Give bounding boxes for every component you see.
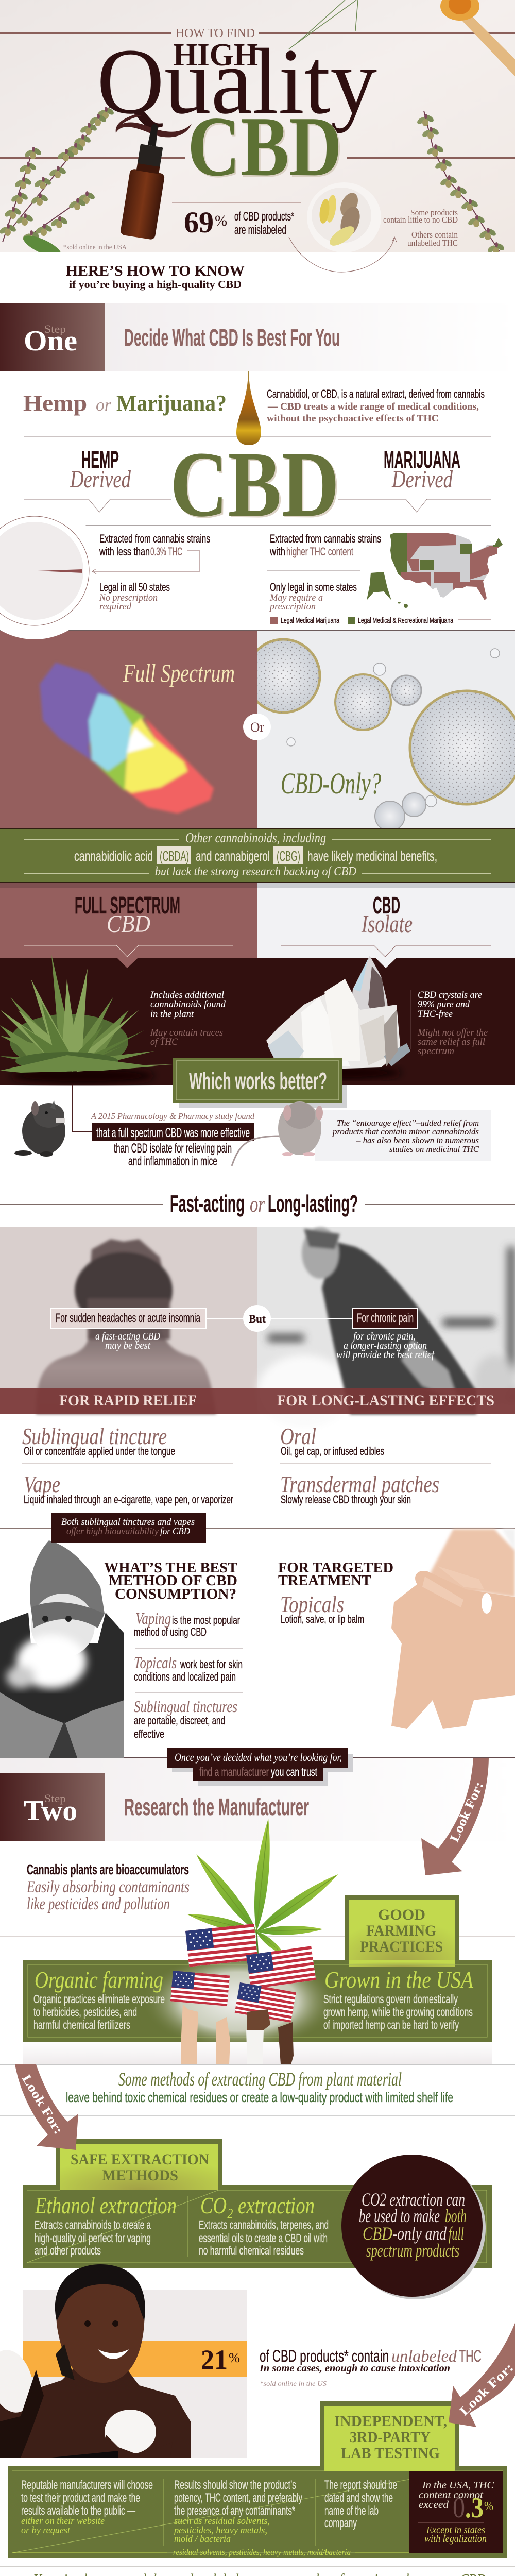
banner: relief labels: FOR LONG-LASTING EFFECTS [277,1392,494,1409]
panel: entourage effect: products that contain minor cannabinoids [332,1127,479,1137]
text: unlabeled THC [259,2347,482,2388]
callout: CO2 extraction oval: both [445,2206,467,2226]
text: method notes: Topicals [134,1653,177,1672]
callout: THC limit: 0 [453,2492,465,2524]
text: oral: Oral [280,1423,316,1449]
text: sublingual tincture: Oil or concentrate applied under the tongue [24,1445,175,1458]
legend: map key [270,616,491,625]
callout: find a manufacturer [167,1748,353,1786]
text: sublingual tincture: Sublingual tincture [22,1423,167,1449]
callout: rapid relief [50,1309,353,1351]
text: 2015 study: that a full spectrum CBD was more effective [96,1126,250,1140]
title: High Quality CBD: CBD [187,99,342,194]
text: marijuana facts: Extracted from cannabis strains [270,532,381,545]
text: unlabeled THC: In some cases, enough to cause intoxication [259,2363,450,2374]
illustration: smiling woman [0,2264,191,2458]
callout: CO2 extraction oval: CBD [363,2223,392,2244]
panel: good farming: Organic practices eliminate exposure [33,1992,165,2006]
text: column report: name of the lab [324,2504,379,2518]
panel: 21 percent photo: 21 [201,2344,228,2375]
panel: step two background: Two [24,1795,77,1827]
panel: good farming: GOOD [378,1906,425,1923]
panel: other cannabinoids band: (CBG) [277,848,300,864]
callout: find a manufacturer: Once you’ve decided what you’re looking for, [175,1751,342,1764]
illustration: CBD crystal [266,956,410,1070]
panel: good farming: harmful chemical fertilizers [33,2018,130,2031]
text: hemp facts: No prescription [99,592,158,603]
text: unlabeled THC: of CBD products* contain [260,2347,389,2365]
heading: best method [104,1560,237,1602]
panel: step one header [0,303,515,371]
heading: targeted treatment [278,1560,393,1625]
text: method notes: is the most popular [172,1614,240,1626]
panel: step one header: One [24,325,77,357]
panel: good farming: to herbicides, pesticides, and [33,2005,137,2019]
panel: good farming: FARMING [366,1922,436,1939]
text: isolate notes [410,990,488,1057]
legend: map key: Legal Medical Marijuana [281,616,339,625]
text: method notes: Sublingual tinctures [134,1697,237,1716]
panel: full spectrum CBD header [0,883,257,958]
text: vape [24,1471,233,1506]
panel: safe extraction: METHODS [102,2167,178,2184]
heading: here's how to know: HERE’S HOW TO KNOW [66,263,245,279]
panel: CBD isolate header [257,883,515,958]
panel: entourage effect: The “entourage effect”–added relief from [337,1118,479,1128]
arrow: look for farming [421,1758,489,1875]
illustration: hands with lotion [391,1529,515,1729]
text: column results [173,2478,302,2545]
heading: here's how to know [66,263,245,291]
text: column results: the presence of any contaminants* [174,2504,295,2518]
text: hemp facts: Extracted from cannabis strains [99,532,210,545]
panel: entourage effect: studies on medicinal THC [389,1144,479,1154]
panel: lab testing: 3RD-PARTY [350,2429,431,2446]
panel: step two background [0,1758,515,1841]
panel: 21 percent photo: % [229,2350,240,2365]
heading: hemp or marijuana: Hemp [23,391,87,416]
icon: basil sprigs left [0,106,115,261]
panel: consumption methods [22,1423,491,1506]
panel: safe extraction: Extracts cannabinoids to create a [35,2218,151,2231]
illustration: waving flags [170,1924,316,2064]
icon: dropper bottle [120,121,173,240]
badge: but: But [249,1312,266,1325]
stat: 69% mislabeled: of CBD products* [234,210,294,224]
text: column report: The report should be [324,2478,397,2492]
callout: bioavailability: offer high bioavailability [66,1526,159,1537]
heading: fast-acting or long-lasting: Long-lasting? [268,1190,358,1217]
panel: safe extraction: no harmful chemical residues [199,2244,304,2257]
arrow: look for farming: Look For: [448,1780,486,1844]
text: isolate notes: CBD crystals are [418,990,482,1001]
panel: other cannabinoids band: and cannabigerol [196,848,270,864]
callout: find a manufacturer: find a manufacturer [199,1765,269,1778]
text: bioaccumulators [26,1861,190,1913]
icon: basil sprig right [416,111,505,255]
callout: THC limit: % [484,2500,493,2513]
panel: CBD isolate header: CBD [373,892,400,919]
text: extraction intro: Some methods of extracting CBD from plant material [118,2069,402,2090]
callout: bioavailability: Both sublingual tinctures and vapes [61,1517,195,1528]
text: full spectrum notes: in the plant [150,1009,194,1020]
heading: hemp or marijuana: or [96,396,112,415]
heading: targeted treatment: Lotion, salve, or lip balm [281,1613,364,1625]
text: full spectrum notes: May contain traces [150,1027,223,1038]
callout: THC limit: .3 [465,2492,484,2524]
text: method notes: effective [134,1727,164,1740]
panel: good farming: PRACTICES [360,1938,443,1955]
panel: other cannabinoids band: (CBDA) [160,848,189,864]
text: isolate notes: 99% pure and [418,999,470,1010]
callout: chronic pain [336,1309,435,1361]
text: sublingual tincture [22,1423,175,1458]
text: mislabeled detail: contain little to no CBD [383,215,458,225]
arrow: look for lab testing [449,2323,515,2427]
callout: CO2 extraction oval: spectrum products [366,2240,459,2261]
text: column reputable [21,2478,153,2536]
panel: step two background: Step [44,1792,66,1805]
banner: relief labels: FOR RAPID RELIEF [59,1392,197,1409]
text: bioaccumulators: Easily absorbing contaminants [26,1878,190,1896]
text: column results: such as residual solvents, [174,2516,270,2527]
heading: best method: WHAT’S THE BEST [104,1560,237,1576]
text: vape: Liquid inhaled through an e-cigarette, vape pen, or vaporizer [24,1493,233,1506]
icon: white mouse [232,1101,323,1166]
text: bioaccumulators: Cannabis plants are bioaccumulators [27,1861,189,1877]
callout: THC limit: exceed [419,2499,449,2511]
panel: lab testing [8,2401,507,2558]
text: unlabeled THC: THC [459,2347,482,2365]
callout: rapid relief: a fast-acting CBD [95,1331,160,1342]
illustration: cannabis plant [0,955,173,1073]
text: hemp facts: 0.3% THC [150,545,182,558]
text: cannabidiol definition: — CBD treats a wide range of medical conditions, [267,401,479,412]
panel: good farming [23,1895,492,2050]
text: marijuana facts [267,532,381,612]
panel: step one header: Step [44,323,66,335]
label: hemp derived [70,446,131,493]
text: contaminants footnote: residual solvents, pesticides, heavy metals, mold/bacteria [173,2547,351,2557]
panel: safe extraction: high-quality oil perfect for vaping [35,2231,151,2245]
callout: chronic pain: a longer-lasting option [344,1340,427,1351]
heading: hemp or marijuana [23,391,227,416]
title: High Quality CBD [97,30,377,195]
text: isolate notes: THC-free [418,1009,453,1020]
callout: CO2 extraction oval: CO2 extraction can [362,2189,465,2210]
text: column reputable: Reputable manufacturers will choose [21,2478,153,2492]
icon: dark mouse [14,1100,65,1157]
panel: step two background: Research the Manufacturer [124,1793,309,1820]
footnote: sold online: *sold online in the USA [63,244,127,251]
text: bioaccumulators: like pesticides and pollution [27,1895,170,1913]
text: extraction intro [66,2069,453,2105]
label: hemp derived: Derived [70,466,131,493]
text: column results: mold / bacteria [174,2534,231,2545]
badge: or [243,714,271,740]
stat: 69% mislabeled [184,206,294,239]
illustration: spectrum blob [40,663,214,814]
panel: dark comparison [0,955,515,1085]
text: oral [280,1423,384,1458]
text: vape: Vape [24,1471,60,1497]
callout: bioavailability: for CBD [160,1526,190,1537]
callout: rapid relief: For sudden headaches or acute insomnia [56,1311,200,1325]
heading: big CBD: CBD [170,433,339,536]
callout: find a manufacturer: you can trust [271,1765,317,1778]
panel: other cannabinoids band: Other cannabinoids, including [185,830,326,845]
text: unlabeled THC: unlabeled [391,2347,457,2366]
panel: full spectrum CBD header: CBD [107,910,150,938]
panel: CBD only [247,630,515,831]
panel: other cannabinoids band: cannabidiolic acid [74,848,153,864]
callout: CO2 extraction oval: be used to make [359,2206,440,2226]
text: method notes: Vaping [135,1609,171,1628]
text: full spectrum notes: cannabinoids found [150,999,226,1010]
panel: entourage effect: – has also been shown in numerous [356,1136,479,1145]
panel: full spectrum [0,630,257,828]
text: isolate notes: Might not offer the [417,1027,488,1038]
callout: CO2 extraction oval: full [449,2223,464,2244]
callout: CO2 extraction oval [341,2155,486,2299]
heading: how to find: HOW TO FIND [176,27,255,40]
callout: which works better [173,1058,347,1108]
text: hemp facts: required [99,601,131,612]
callout: rapid relief: may be best [105,1340,150,1351]
callout: THC limit: with legalization [424,2533,487,2545]
text: column results: potency, THC content, and preferably [174,2491,302,2505]
heading: big CBD: CBD [171,434,341,538]
arrow: look for lab testing: Look For: [457,2361,515,2418]
text: marijuana facts: higher THC content [286,545,353,558]
badge: or: Or [250,720,264,735]
text: method notes: work best for skin [180,1658,243,1671]
text: 2015 study: than CBD isolate for relieving pain [114,1141,232,1156]
panel: CBD only: CBD-Only? [281,767,381,800]
text: cannabidiol definition [267,387,485,424]
text: isolate notes: spectrum [418,1046,454,1057]
text: hemp facts: with less than [99,545,150,558]
callout: which works better: Which works better? [189,1067,327,1094]
illustration: cannabis leaf [186,1818,341,1958]
text: marijuana facts: prescription [269,601,316,612]
stat: 69% mislabeled: 69 [184,206,214,239]
callout: THC limit [409,2471,503,2553]
arrow: hemp THC pointer [92,551,200,574]
panel: 21 percent photo [0,2264,247,2458]
callout: chronic pain: will provide the best relief [336,1349,435,1361]
icon: grass stems [289,0,358,49]
callout: bioavailability [51,1513,206,1543]
callout: THC limit: content cannot [419,2489,483,2501]
panel: lab testing: INDEPENDENT, [334,2413,447,2430]
callout: chronic pain: for chronic pain, [353,1331,416,1342]
text: method notes: method of using CBD [134,1625,207,1638]
badge: but [243,1305,271,1332]
text: hemp facts [99,532,210,612]
panel: safe extraction: Extracts cannabinoids, terpenes, and [199,2218,329,2231]
panel: safe extraction [23,2139,492,2268]
icon: oil drop [236,371,261,445]
illustration: woman vaping [0,1540,124,1758]
stat: 69% mislabeled: % [215,212,227,229]
text: full spectrum notes: of THC [150,1037,178,1047]
text: mislabeled detail: unlabelled THC [407,238,458,248]
panel: safe extraction: SAFE EXTRACTION [71,2151,209,2168]
text: column report: dated and show the [324,2491,393,2505]
text: cannabidiol definition: without the psychoactive effects of THC [267,413,439,424]
banner: relief labels [0,1388,515,1414]
text: 2015 study [91,1111,254,1168]
panel: photo woman with headache [0,1227,257,1414]
text: marijuana facts: with [269,545,285,558]
text: column report [324,2478,397,2530]
panel: step one header: Decide What CBD Is Best For You [124,324,340,351]
text: column report: company [324,2516,357,2530]
legend: map key: Legal Medical & Recreational Marijuana [358,616,453,625]
panel: good farming: Grown in the USA [324,1967,474,1993]
panel: other cannabinoids band: but lack the strong research backing of CBD [155,865,356,878]
title: High Quality CBD: Quality [97,30,377,133]
text: transdermal patches: Slowly release CBD through your skin [281,1493,411,1506]
text: column reputable: results available to the public — [21,2504,135,2518]
heading: targeted treatment: TREATMENT [278,1572,371,1589]
heading: hemp or marijuana: Marijuana? [116,391,227,416]
title: High Quality CBD: HIGH [173,38,258,73]
text: unlabeled THC: *sold online in the US [260,2380,327,2388]
arrow: look for extraction [15,2064,78,2150]
text: 2015 study: and inflammation in mice [128,1154,217,1168]
panel: full spectrum CBD header: FULL SPECTRUM [75,892,180,919]
text: column reputable: to test their product and make the [21,2491,140,2505]
text: method notes: conditions and localized pain [134,1670,236,1683]
panel: safe extraction: essential oils to create a CBD oil with [199,2231,328,2245]
text: method notes: are portable, discreet, and [134,1714,225,1727]
panel: safe extraction: CO₂ extraction [200,2192,315,2218]
text: mislabeled detail [383,208,458,248]
callout: chronic pain: For chronic pain [357,1311,414,1325]
text: mislabeled detail: Some products [410,208,458,217]
label: hemp derived: HEMP [81,446,119,473]
heading: best method: CONSUMPTION? [115,1586,236,1602]
text: column results: Results should show the product’s [174,2478,296,2492]
heading: fast-acting or long-lasting: or [250,1192,265,1217]
panel: safe extraction: and other products [35,2244,101,2257]
panel: hero [0,0,515,261]
panel: other cannabinoids band [0,828,515,883]
callout: CO2 extraction oval: -only and [392,2223,447,2244]
text: column reputable: either on their website [21,2516,105,2527]
icon: gauge circle [0,502,103,639]
heading: targeted treatment: Topicals [280,1591,344,1617]
panel: other cannabinoids band: have likely medicinal benefits, [307,848,437,864]
text: mislabeled detail: Others contain [411,230,458,240]
arrow: look for extraction: Look For: [19,2072,65,2137]
panel: good farming: Organic farming [35,1967,163,1993]
panel: photo man with back pain [257,1227,515,1427]
heading: fast-acting or long-lasting [0,1190,515,1217]
text: full spectrum notes [143,990,226,1049]
text: hemp facts: Legal in all 50 states [99,581,170,594]
heading: best method: METHOD OF CBD [109,1572,237,1589]
callout: THC limit: In the USA, THC [422,2480,494,2491]
icon: wooden spoon [440,0,515,76]
label: marijuana derived: Derived [391,466,453,493]
text: marijuana facts: May require a [269,592,323,603]
arrow: curved pointer [289,237,397,272]
stat: 69% mislabeled: are mislabeled [234,223,286,237]
text: oral: Oil, gel cap, or infused edibles [281,1445,384,1458]
text: column reputable: or by request [21,2525,71,2536]
map: US legal status [367,531,505,608]
panel: entourage effect [315,1110,491,1161]
panel: good farming: Strict regulations govern domestically [323,1992,458,2006]
heading: here's how to know: if you’re buying a high-quality CBD [69,278,242,291]
icon: bowl of capsules [307,182,381,252]
text: transdermal patches: Transdermal patches [280,1471,439,1497]
divider: notched lines [24,499,491,512]
callout: THC limit: Except in states [426,2524,485,2536]
text: full spectrum notes: Includes additional [150,990,224,1001]
text: method notes [134,1609,243,1740]
heading: fast-acting or long-lasting: Fast-acting [170,1190,245,1217]
panel: CBD isolate header: Isolate [361,910,413,938]
text: transdermal patches [280,1471,439,1506]
text: 2015 study: A 2015 Pharmacology & Pharmacy study found [91,1111,254,1121]
panel: full spectrum: Full Spectrum [123,658,235,687]
panel: safe extraction: Ethanol extraction [35,2192,177,2218]
text: column results: pesticides, heavy metals, [173,2525,267,2536]
text: marijuana facts: Only legal in some states [270,581,357,594]
label: marijuana derived [384,446,460,493]
text: isolate notes: same relief as full [418,1037,485,1047]
title: High Quality CBD: CBD [189,100,344,195]
panel: lab testing: LAB TESTING [341,2445,440,2462]
heading: targeted treatment: FOR TARGETED [278,1560,393,1576]
